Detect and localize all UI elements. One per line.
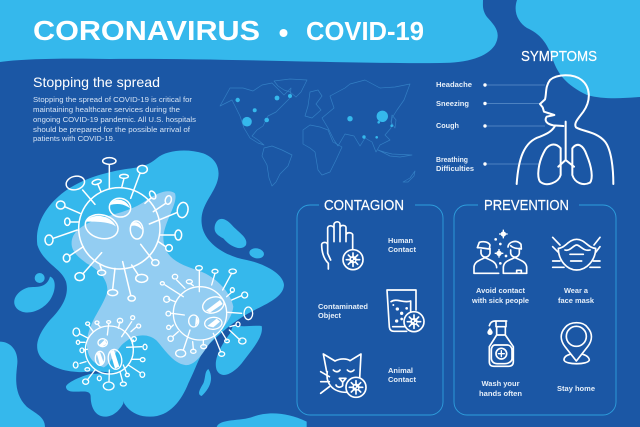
blob: oval [249,247,265,260]
header band [0,0,498,63]
label: stay home: Stay home [557,384,595,393]
blob: upper right small [215,219,246,248]
icon: sick people [474,230,527,273]
label: wear a face mask: Wear a [564,286,589,295]
blob: right lower [216,325,262,375]
icon: glass [387,290,424,332]
label: human contact [388,236,416,254]
title: CORONAVIRUS [33,15,260,46]
heading: prevention: PREVENTION [484,198,569,214]
blob: main [37,151,284,417]
icon: hand [322,222,363,270]
virus small [73,316,147,390]
icon: human figure with lungs [517,75,613,184]
symptom: breathing difficulties: Difficulties [436,164,474,173]
virus illustration [0,151,307,427]
symptom: breathing difficulties: Breathing [436,155,468,164]
label: wash your hands often [479,379,522,398]
blob: lower lobe [66,373,123,417]
blob: left dot [35,273,45,283]
virus large [45,158,189,301]
icon: hand soap bottle [487,321,513,366]
label: wash your hands often: hands often [479,389,522,398]
blob: left drop [14,277,55,312]
text block: intro: maintaining healthcare services during the [33,105,180,114]
label: wash your hands often: Wash your [482,379,520,388]
label: wear a face mask: face mask [558,296,595,305]
heading: contagion: CONTAGION [324,198,404,214]
icon: face mask [553,237,600,270]
text block: intro: patients with COVID-19. [33,134,115,143]
label: animal contact: Animal [388,366,413,375]
text block: intro [33,95,196,143]
label: animal contact: Contact [388,375,416,384]
label: contaminated object: Contaminated [318,302,368,311]
panel: prevention [454,198,616,415]
text block: intro: Stopping the spread of COVID-19 is critical for [33,95,192,104]
label: human contact: Human [388,236,413,245]
label: avoid contact with sick people: Avoid contact [476,286,525,295]
text block: intro: ongoing COVID-19 pandemic. All U.S. hospitals [33,115,196,124]
virus right [160,266,253,357]
icon: cat [321,354,366,397]
label: animal contact [388,366,416,384]
symptom: cough: Cough [436,121,459,130]
world map [220,79,415,186]
blob: bottom [217,413,307,427]
subtitle: COVID-19 [306,16,424,46]
symptom: sneezing: Sneezing [436,99,469,108]
label: human contact: Contact [388,245,416,254]
heading: symptoms: SYMPTOMS [521,49,597,65]
label: contaminated object: Object [318,311,341,320]
symptom list [436,80,545,173]
text block: intro: should be prepared for the possible arrival of [33,125,191,134]
blob: pale overlay [72,191,233,367]
blob: bottom left corner [0,342,45,427]
map markers [236,94,393,139]
icon: location pin [561,323,591,364]
panel: contagion [297,198,443,415]
title separator dot [280,29,288,37]
label: avoid contact with sick people: with sick people [471,296,529,305]
blob: drop [199,369,211,396]
label: wear a face mask [558,286,595,305]
symptom: headache: Headache [436,80,472,89]
label: avoid contact with sick people [471,286,529,305]
symptom: breathing difficulties [436,155,540,173]
label: contaminated object [318,302,368,320]
top right blob [516,0,640,98]
heading: stopping the spread: Stopping the spread [33,74,160,90]
